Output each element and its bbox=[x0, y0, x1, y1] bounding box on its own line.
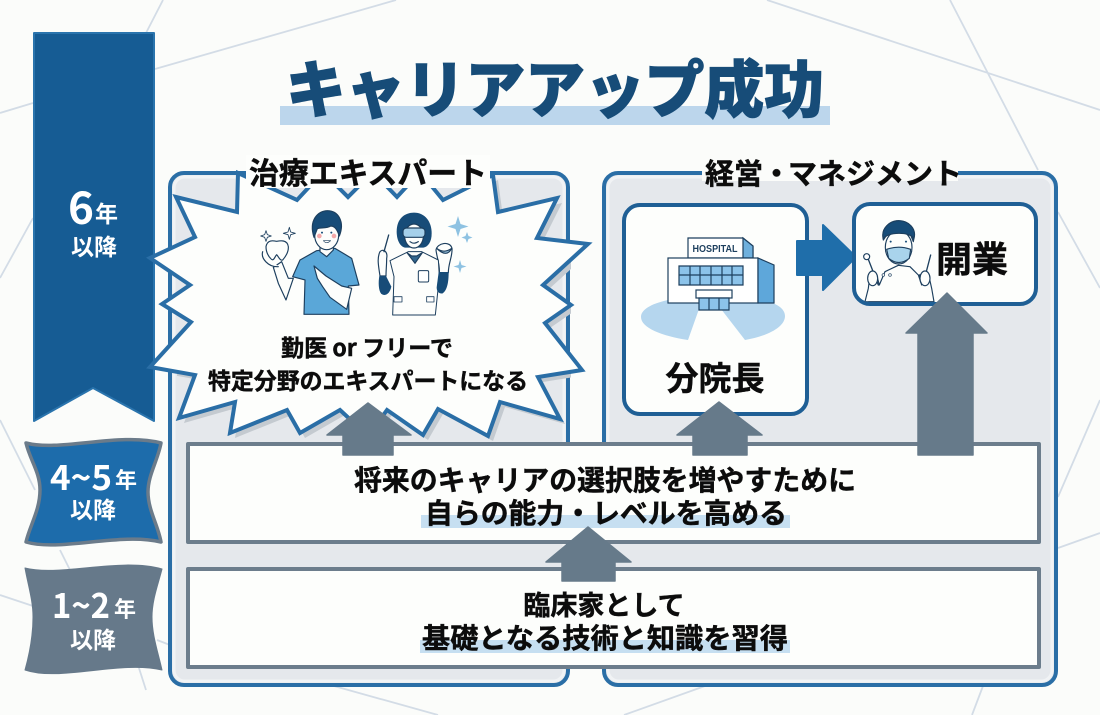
card: 分院長 bbox=[624, 205, 807, 414]
panel: 経営・マネジメント background bbox=[604, 173, 1056, 685]
icon: female dentist with goggles bbox=[378, 213, 452, 315]
heading gap: right panel bbox=[702, 165, 958, 181]
card: 分院長: 分院長 bbox=[666, 352, 764, 400]
arrow: up to 治療エキスパート bbox=[327, 403, 411, 455]
text: expert description bbox=[208, 329, 528, 396]
arrow: 分院長 to 開業 bbox=[797, 225, 856, 290]
flag: 4~5年以降: 年 bbox=[115, 463, 137, 495]
arrow: up to 開業 bbox=[906, 293, 987, 455]
box: 将来のキャリア: 将来のキャリアの選択肢を増やすために bbox=[354, 459, 856, 499]
heading: 経営・マネジメント: マネジメント bbox=[788, 151, 962, 193]
box: 臨床家: 基礎となる技術と知識を習得 bbox=[422, 617, 788, 657]
flag: 4~5年以降: 4~5 bbox=[50, 451, 112, 500]
arrow: up to 分院長 bbox=[677, 402, 762, 455]
icon: masked dentist bbox=[864, 221, 934, 302]
ribbon: 6年以降 bbox=[34, 33, 154, 421]
box: 臨床家 bbox=[188, 569, 1039, 667]
icon: hospital: HOSPITAL bbox=[692, 244, 738, 255]
ribbon: 6年以降: 年 bbox=[95, 195, 118, 229]
text: expert description: 勤医 or フリーで bbox=[281, 329, 453, 363]
starburst callout bbox=[150, 172, 588, 436]
starburst shadow bbox=[177, 180, 571, 441]
panel: 治療エキスパート background bbox=[170, 173, 568, 685]
text: expert description: 特定分野のエキスパートになる bbox=[208, 362, 528, 396]
heading: 治療エキスパート: 治療エキスパート bbox=[249, 149, 487, 193]
arrow: up from 臨床家 bbox=[546, 527, 631, 581]
ribbon: 6年以降: 6 bbox=[68, 173, 94, 237]
icon: sparkles bbox=[448, 216, 472, 273]
box: 臨床家: 臨床家として bbox=[523, 584, 685, 623]
flag: 1~2年以降: 以降 bbox=[70, 621, 116, 655]
ribbon: 6年以降: 以降 bbox=[71, 228, 117, 262]
icon: male dentist holding tooth bbox=[261, 211, 359, 314]
flag: 4~5年以降 bbox=[26, 440, 161, 545]
heading: 経営・マネジメント: 経営 bbox=[705, 151, 763, 193]
card: 開業 bbox=[854, 204, 1036, 304]
card: 開業: 開業 bbox=[936, 231, 1008, 283]
flag: 1~2年以降 bbox=[25, 565, 162, 674]
flag: 1~2年以降: 年 bbox=[114, 592, 136, 624]
box: 将来のキャリア: 自らの能力・レベルを高める bbox=[425, 492, 787, 532]
icon: hospital bbox=[641, 238, 785, 340]
title: キャリアアップ成功 bbox=[286, 40, 824, 130]
box: 将来のキャリア bbox=[188, 444, 1039, 542]
flag: 4~5年以降: 以降 bbox=[70, 491, 116, 525]
heading: 経営・マネジメント: ・ bbox=[762, 151, 791, 193]
flag: 1~2年以降: 1~2 bbox=[52, 579, 110, 628]
